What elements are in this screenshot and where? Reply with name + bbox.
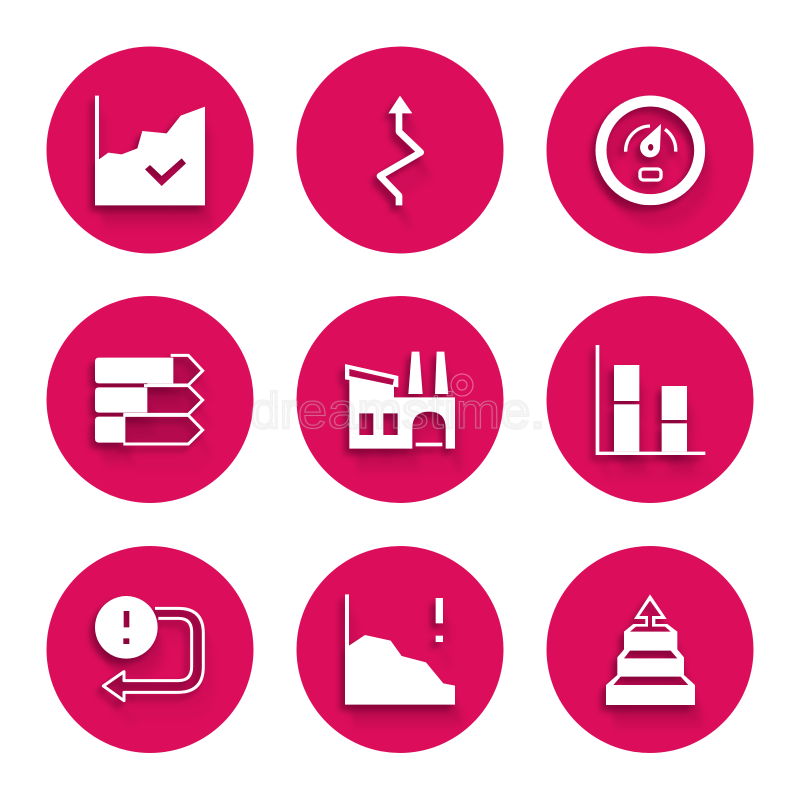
watermark: dreamstime. bbox=[250, 383, 545, 439]
badge: stacked arrow bars bbox=[46, 296, 254, 503]
badge: winding arrow bbox=[296, 46, 504, 254]
badge: pyramid with arrow bbox=[546, 546, 754, 753]
badge: factory bbox=[296, 296, 504, 503]
badge: stacked bar chart bbox=[546, 296, 754, 503]
badge: warning with return arrow bbox=[46, 546, 254, 753]
badge: falling area chart with exclamation bbox=[296, 546, 504, 753]
badge: speedometer gauge bbox=[546, 46, 754, 254]
badge: area chart with check mark bbox=[46, 46, 254, 254]
watermark: dreamstime. bbox=[250, 383, 545, 439]
